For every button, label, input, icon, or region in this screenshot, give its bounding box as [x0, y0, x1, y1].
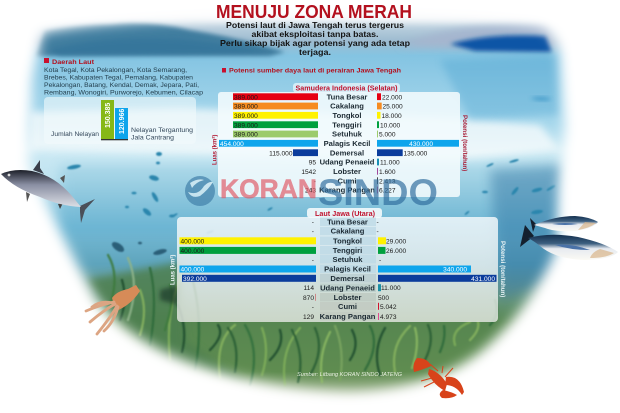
- values: 4.973: [380, 314, 397, 321]
- values: 389.000: [234, 94, 258, 101]
- chart: nelayan: Jala Cantrang: [131, 134, 174, 142]
- values: 389.000: [234, 122, 258, 129]
- icon: squid: [86, 285, 140, 334]
- category labels: Lobster: [334, 293, 361, 302]
- category labels: Udang Penaeid: [320, 158, 375, 167]
- values: 430.000: [409, 141, 433, 148]
- panel heading: laut jawa: Laut Jawa (Utara): [315, 209, 376, 218]
- category labels: Tongkol: [333, 236, 362, 245]
- chart: nelayan: 120.966: [119, 109, 126, 134]
- title: MENUJU ZONA MERAH: [216, 1, 412, 22]
- category labels: Palagis Kecil: [324, 139, 370, 148]
- values: 129: [303, 314, 314, 321]
- text: list of regions: [44, 67, 203, 96]
- values: 114: [303, 285, 314, 292]
- axis label: potensi: Potensi (ton/tahun): [499, 241, 506, 297]
- values: 243: [305, 188, 316, 195]
- values: -: [379, 257, 381, 264]
- values: -: [376, 219, 379, 226]
- values: 400.000: [180, 266, 205, 274]
- chart: nelayan: Nelayan Tergantung: [131, 127, 193, 134]
- icon: tuna left: [1, 160, 95, 223]
- intro text: [220, 20, 410, 57]
- category labels: Demersal: [330, 274, 365, 283]
- values: [220, 94, 433, 195]
- icon: lobster: [413, 358, 464, 398]
- seaweed strokes: [108, 255, 497, 385]
- category labels: Cumi: [338, 302, 357, 311]
- axis label: potensi: Potensi (ton/tahun): [461, 115, 468, 171]
- values: 22.000: [382, 94, 403, 101]
- panel: laut jawa: [170, 208, 506, 322]
- values: 6.227: [379, 188, 396, 195]
- watermark: koran sindo: KORAN: [220, 174, 317, 204]
- values: 389.000: [234, 104, 258, 111]
- values: 454.000: [220, 141, 244, 148]
- values: 389.000: [234, 113, 258, 120]
- source credit: Sumber: Litbang KORAN SINDO JATENG: [297, 372, 402, 378]
- category labels: Setuhuk: [333, 255, 363, 264]
- category labels: Lobster: [333, 167, 361, 176]
- category labels: Karang Pangan: [320, 312, 376, 321]
- values: 11.000: [381, 285, 401, 292]
- text: list of regions: Pekalongan, Batang, Kendal, Demak, Jepara, Pati,: [44, 82, 199, 89]
- chart: nelayan: [44, 97, 196, 144]
- panel heading: samudera: Samudera Indonesia (Selatan): [296, 84, 398, 92]
- bars: right: [378, 237, 496, 320]
- values: 400.000: [180, 238, 205, 245]
- axis label: luas: Luas (km²): [170, 255, 176, 285]
- values: 5.042: [380, 304, 397, 311]
- intro text: Perlu sikap bijak agar potensi yang ada tetap: [220, 38, 410, 48]
- category labels: Setuhuk: [332, 130, 363, 139]
- category labels: Tenggiri: [332, 120, 362, 129]
- values: 29.000: [386, 238, 407, 245]
- heading: daerah laut: [44, 58, 95, 66]
- values: [180, 219, 495, 321]
- category labels: Udang Penaeid: [320, 283, 375, 292]
- category labels: Cakalang: [330, 102, 364, 111]
- bars: left: [219, 93, 318, 156]
- icon: globe: [185, 176, 215, 206]
- bars: right: [377, 93, 459, 193]
- heading: daerah laut: Daerah Laut: [52, 59, 95, 66]
- category labels: Tuna Besar: [327, 217, 368, 226]
- values: -: [314, 178, 316, 185]
- values: 18.000: [382, 113, 402, 120]
- values: 11.000: [380, 160, 400, 167]
- values: -: [312, 228, 314, 236]
- intro text: akibat eksploitasi tanpa batas.: [252, 29, 378, 39]
- label cells: [320, 218, 376, 320]
- heading: potensi sumber daya: Potensi sumber daya laut di perairan Jawa Tengah: [229, 68, 401, 75]
- watermark: koran sindo: SINDO: [318, 172, 438, 213]
- icon: tuna right large: [520, 225, 618, 260]
- intro text: terjaga.: [299, 47, 331, 57]
- values: 115.000: [269, 150, 293, 157]
- intro text: Potensi laut di Jawa Tengah terus tergerus: [226, 20, 404, 30]
- small fish: [67, 152, 556, 256]
- values: 389.000: [234, 132, 258, 139]
- category labels: [320, 217, 376, 321]
- values: 1.600: [379, 169, 396, 176]
- text: list of regions: Rembang, Wonogiri, Purworejo, Kebumen, Cilacap: [44, 90, 203, 96]
- panel: daerah laut: [44, 58, 203, 96]
- values: -: [312, 304, 314, 311]
- chart: nelayan: Jumlah Nelayan: [51, 131, 99, 138]
- values: 95: [309, 160, 316, 167]
- category labels: [319, 92, 375, 195]
- values: 5.000: [379, 132, 396, 139]
- values: 392.000: [183, 276, 207, 283]
- values: 400.000: [180, 248, 205, 255]
- category labels: Demersal: [330, 148, 364, 157]
- values: -: [312, 219, 314, 226]
- category labels: Palagis Kecil: [324, 265, 371, 274]
- text: list of regions: Brebes, Kabupaten Tegal, Pemalang, Kabupaten: [44, 74, 193, 82]
- category labels: Karang Pangan: [319, 186, 375, 195]
- values: -: [312, 257, 314, 264]
- values: 10.000: [380, 122, 401, 129]
- icon: tuna right small: [530, 216, 598, 232]
- chart: nelayan: 150.385: [105, 103, 112, 128]
- category labels: Cumi: [338, 176, 356, 185]
- values: 870: [303, 295, 314, 302]
- watermark: koran sindo: [185, 172, 438, 213]
- category labels: Cakalang: [331, 227, 365, 236]
- values: 431.000: [471, 276, 495, 283]
- panel: samudera indonesia: [212, 83, 468, 197]
- values: -: [376, 228, 379, 236]
- values: 135.000: [404, 150, 428, 157]
- values: 500: [378, 295, 389, 302]
- text: list of regions: Kota Tegal, Kota Pekalongan, Kota Semarang,: [44, 67, 187, 74]
- values: 340.000: [443, 266, 467, 274]
- values: 1542: [301, 169, 316, 176]
- values: 26.000: [386, 248, 407, 255]
- values: 25.000: [382, 104, 403, 111]
- values: 2.413: [379, 178, 396, 185]
- category labels: Tongkol: [333, 111, 361, 120]
- axis label: luas: Luas (km²): [212, 135, 218, 165]
- category labels: Tuna Besar: [327, 92, 367, 101]
- category labels: Tenggiri: [333, 246, 362, 255]
- bars: left: [180, 237, 316, 301]
